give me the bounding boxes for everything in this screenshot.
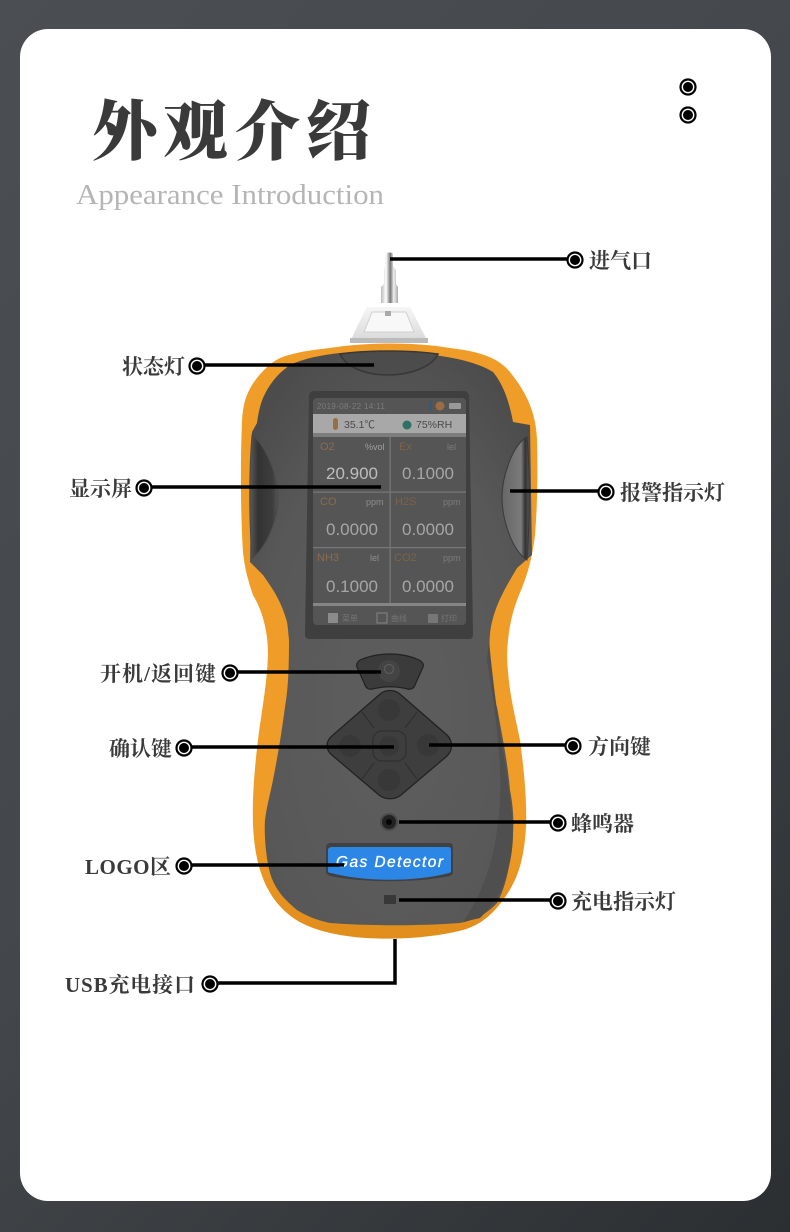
- buzzer: [380, 813, 398, 831]
- callout: USB charging port: USB充电接口: [65, 973, 195, 997]
- bottom menu: 打印: [441, 613, 457, 623]
- callout: charging indicator: [399, 890, 676, 914]
- callout: buzzer: 蜂鸣器: [571, 812, 634, 836]
- gas detector device: [241, 252, 537, 939]
- power button: [357, 654, 423, 689]
- callout: gas inlet: [390, 249, 652, 273]
- logo badge: [326, 843, 453, 881]
- temperature and humidity bar: [313, 414, 466, 437]
- callout: power key: [100, 662, 381, 686]
- screen: 0.0000: [402, 577, 454, 596]
- callout: confirm key: 确认键: [109, 737, 172, 761]
- left alarm light: [250, 435, 278, 558]
- readings text: [317, 441, 461, 564]
- readings text: ppm: [443, 553, 461, 563]
- icon: radio markers: [680, 80, 696, 122]
- screen bezel: [305, 391, 473, 639]
- screen: 0.0000: [326, 520, 378, 539]
- temperature and humidity bar: 75%RH: [416, 419, 452, 431]
- bottom menu: [328, 613, 457, 623]
- charging indicator: [384, 895, 396, 904]
- readings text: H2S: [395, 496, 416, 508]
- callout: alarm light: [510, 481, 725, 505]
- direction pad: [327, 690, 452, 799]
- right alarm light: [502, 437, 529, 560]
- screen: 20.900: [326, 464, 378, 483]
- dark body: [250, 351, 532, 925]
- screen: 0.1000: [326, 577, 378, 596]
- readings text: O2: [320, 441, 335, 453]
- screen: 0.1000: [402, 464, 454, 483]
- status bar: 2019-08-22 14:11: [317, 402, 385, 411]
- callout: direction keys: 方向键: [588, 735, 651, 759]
- readings text: CO2: [394, 552, 417, 564]
- right lower body shade: [463, 640, 513, 922]
- callout: direction keys: [429, 735, 651, 759]
- subtitle: Appearance Introduction: [76, 180, 384, 211]
- readings text: lel: [370, 553, 379, 563]
- readings text: Ex: [399, 441, 412, 453]
- callout: status light: 状态灯: [122, 355, 185, 379]
- orange shell: [241, 344, 537, 939]
- callout: status light: [122, 355, 374, 379]
- readings text: NH3: [317, 552, 339, 564]
- readings text: CO: [320, 496, 337, 508]
- callout: alarm light: 报警指示灯: [620, 481, 725, 505]
- readings grid: [313, 437, 466, 606]
- screen: [313, 398, 466, 625]
- title: 外观介绍: [92, 97, 371, 169]
- readings text: lel: [447, 442, 456, 452]
- logo badge: Gas Detector: [336, 854, 444, 871]
- readings text: ppm: [366, 497, 384, 507]
- callout: confirm key: [109, 737, 394, 761]
- bottom menu: 菜单: [342, 613, 358, 623]
- temperature and humidity bar: 35.1℃: [344, 419, 375, 431]
- callout: logo area: LOGO区: [85, 855, 171, 879]
- readings text: ppm: [443, 497, 461, 507]
- callout: display: [69, 477, 381, 501]
- callout: buzzer: [399, 812, 634, 836]
- callout: gas inlet: 进气口: [589, 249, 652, 273]
- bottom menu: 曲线: [391, 613, 407, 623]
- callout: USB charging port: [65, 939, 395, 997]
- gas inlet probe: [350, 252, 428, 343]
- callout: charging indicator: 充电指示灯: [571, 890, 676, 914]
- callout: power key: 开机/返回键: [100, 662, 216, 686]
- status light: [340, 351, 438, 375]
- screen: 0.0000: [402, 520, 454, 539]
- readings text: %vol: [365, 442, 385, 452]
- callout: logo area: [85, 855, 344, 879]
- callout: display: 显示屏: [69, 477, 132, 501]
